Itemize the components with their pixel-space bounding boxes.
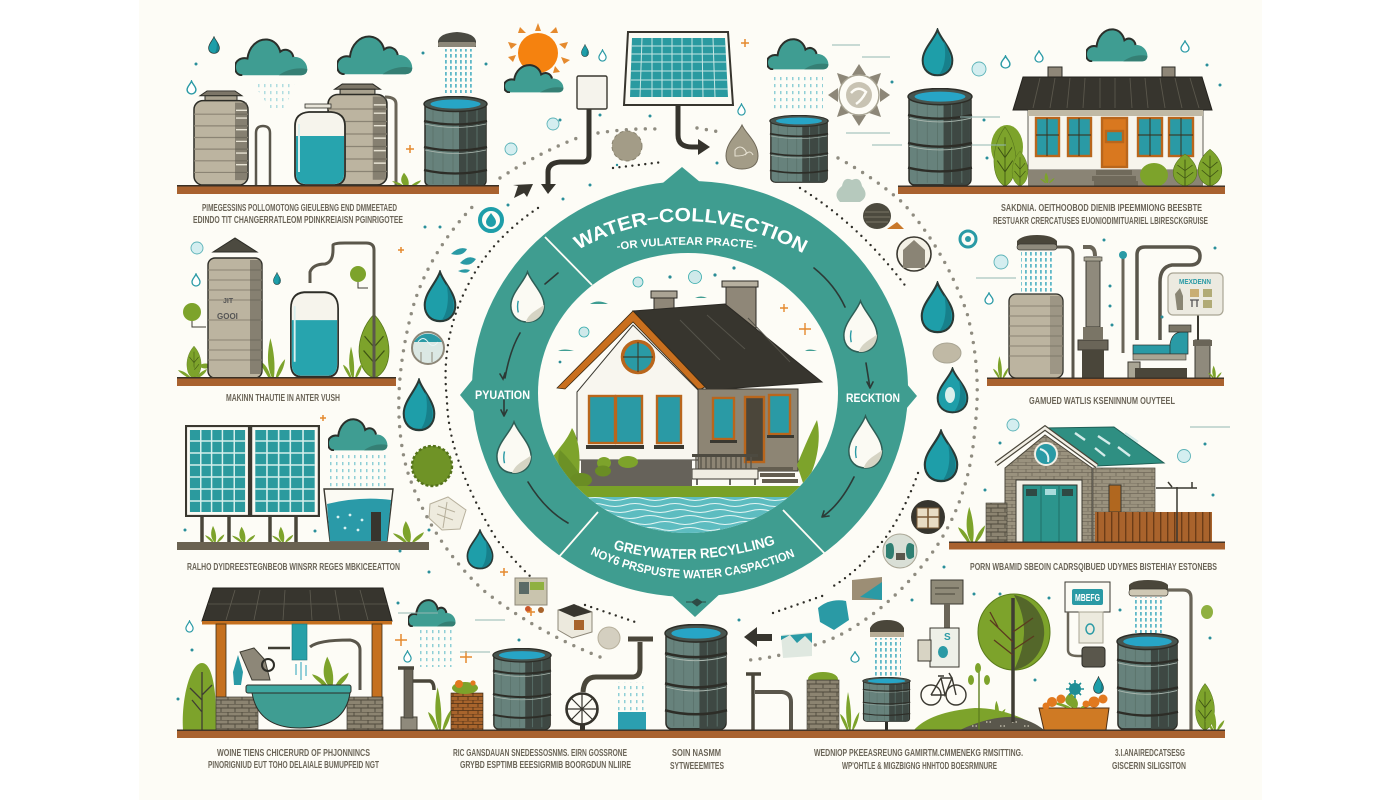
solar panels [186,426,319,516]
caption group C [670,747,724,772]
rear tank [328,84,387,185]
right cloud rain [767,39,828,112]
storage tank [194,91,248,185]
brick walls [216,697,383,730]
tap pipe [310,640,360,690]
ring label right: RECKTION [846,391,900,405]
caption: SAKDNIA. OEITHOOBOD DIENIB IPEEMMIONG BEESBTE [1001,202,1202,214]
tall tank with cone: JIT [223,298,234,305]
icon: arrow left [744,627,772,647]
plants [205,521,424,542]
round window [622,342,654,372]
plants behind [178,266,389,378]
chimneys [651,281,758,332]
flower planter [1039,677,1109,730]
ring water drops [497,272,882,473]
barrel [493,648,551,729]
roof [1013,77,1212,110]
icon: filter disc [412,332,444,364]
deck railing [692,454,758,485]
garage door [1016,480,1082,542]
posts [216,624,382,697]
downpipe [292,624,307,660]
teal water drops around ring [404,272,967,569]
walls [1028,110,1203,186]
plants in basin [233,655,349,687]
icon: house disc [897,237,931,271]
barrel [908,89,972,185]
bicycle [921,673,966,705]
icon: device with valves [515,578,547,613]
panel: garage building [949,427,1225,573]
caption group E: GISCERIN SILIGSITON [1112,760,1186,772]
panel: solar panels and glass [177,419,429,573]
ring band with arrow tips [460,167,917,617]
grey extension [698,389,798,471]
cloud and rain [408,600,456,667]
grass [840,692,859,730]
icon: green shrub ball [412,446,452,486]
panel: top-right house [898,29,1225,227]
info sign: MEXDENN [1179,277,1211,286]
icon: landscape tile [781,632,812,658]
panel pipe arrow [678,105,710,155]
teal roof [1045,427,1164,466]
caption group C: SYTWEEEMITES [670,760,724,772]
main wall [1005,435,1092,542]
small accents: dots, bubbles and plus marks [176,37,1230,700]
rain head and pipe [1017,235,1073,378]
panel: top centre solar and sun [504,23,904,229]
filter column [1078,247,1108,378]
long shelf [177,730,1225,738]
panel: middle-right filtration [987,235,1224,407]
panel: top-left tanks [177,32,499,226]
thin pole [1119,251,1127,353]
caption group A: PINORIGNIUD EUT TOHO DELAIALE BUMUPFEID NGT [208,759,379,771]
shelf [177,542,429,550]
dotted cycle paths [399,128,977,660]
ring subtitle: NOY6 PRSPUSTE WATER CASPACTION [590,546,794,578]
icon: target ring [960,231,976,247]
ring title: WATER–COLLVECTION [572,208,808,253]
control device: S [944,632,951,643]
shrubs [991,125,1222,187]
house illustration [545,266,834,537]
rain mist [252,82,295,108]
white wall [577,325,698,460]
caption: GAMUED WATLIS KSENINNUM OUYTEEL [1029,395,1175,407]
tap [398,668,434,730]
windows and door [1036,118,1193,167]
right column [1193,340,1212,378]
icon: vent box [558,604,592,638]
bottle with pipe [291,243,374,378]
ring flow arrows [500,268,873,523]
caption: EDINDO TIT CHANGERRATLEOM PDINKREIAISN PGINRIGOTEE [193,214,403,226]
caption group D: WEDNIOP PKEEASREUNG GAMIRTM.CMMENEKG RMSITTING. [814,747,1023,759]
rain head [438,32,476,93]
caption group E [1112,747,1186,772]
tall tank with cone: GOOI [217,312,238,321]
rain head and small barrel [863,620,910,730]
icon: striped stone [933,343,961,363]
caption group B: RIC GANSDAUAN SNEDESSOSNMS. EIRN GOSSRONE [453,747,627,759]
caption group B: GRYBD ESPTIMB EEESIGRMIB BOORGDUN NLIIRE [460,759,631,771]
caption group D [814,747,1023,772]
panel legs [202,517,296,542]
caption: MAKINN THAUTIE IN ANTER VUSH [226,392,340,404]
mullions [1036,118,1193,156]
caption: PORN WBAMID SBEOIN CADRSQIBUED UDYMES BISTEHIAY ESTONEBS [970,561,1217,573]
caption group E: 3.I.ANAIREDCATSESG [1115,747,1185,759]
rain head and barrel right [1117,580,1191,730]
teal pipe and pump [1128,325,1191,378]
tall tank with cone [208,238,262,378]
icon: grey circle diagram [883,534,917,568]
sun cloud [504,65,563,92]
barrel [424,96,487,186]
sky details [558,266,817,363]
tree [978,594,1050,722]
roof [633,304,822,390]
brick pillar [958,503,1007,542]
stone discs [612,125,758,169]
ring subtitle: GREYWATER RECYLLING [614,536,774,559]
large barrel [665,625,727,729]
house windows and door [589,395,790,462]
round vent [1035,443,1057,465]
segment dividers [545,237,828,558]
panel: bottom row fixtures [177,580,1225,772]
ring label left: PYUATION [475,388,530,402]
sun [508,23,570,73]
extension wall [1093,468,1155,542]
panel: pergola with basin [183,588,392,730]
caption [993,202,1208,227]
ring title: -OR VULATEAR PRACTE- [617,237,756,250]
caption [193,202,403,226]
brick planter [451,680,483,730]
water glass [324,489,393,541]
icon: white block [429,497,466,530]
gear machine [240,648,290,680]
control device [918,580,963,667]
sign and pump [1065,582,1110,667]
water splash [296,662,306,680]
overhead pipes [1137,247,1200,340]
central ring [460,167,917,617]
caption: RESTUAKR CRERCATUSES EUONIODIMITUARIEL LBIRESCKGRUISE [993,215,1208,227]
cloud [1086,29,1147,61]
pipe arch [256,126,270,186]
window sills [586,435,794,449]
shelf [987,378,1224,386]
caption group D: WP'OHTLE & MIGZBIGNG HNHTOD BOESRMNURE [842,760,997,772]
side pipe [385,97,396,186]
cloud and rain [327,419,388,490]
icon: teal map tile [818,600,849,630]
grass [428,687,451,730]
shelf [949,542,1225,550]
caption group A [208,747,379,771]
caption group C: SOIN NASMM [672,747,721,759]
pipe rain [617,682,647,730]
shelf [177,377,396,386]
sign and pump: MBEFG [1075,593,1100,604]
side window [1109,485,1121,512]
pond water [588,497,788,533]
icon: window disc [911,500,945,534]
pole lamps [1156,482,1197,542]
wheel and pipe [566,639,653,732]
fence [1095,512,1212,542]
inner disc [538,253,838,533]
beige tank [1009,294,1063,378]
glass bottle [295,104,345,185]
pale stones [836,179,904,229]
brick column [807,672,839,730]
shelf [898,186,1225,194]
pergola roof [202,588,392,624]
solar panel [624,32,733,105]
small ring icons [412,209,976,658]
gable trim [996,428,1097,466]
icon: blue swirl [451,248,476,273]
icon: stone disc [598,627,620,649]
icon: hillside tile [852,577,882,600]
steps [758,467,798,483]
post pipe [746,674,791,737]
caption group B [453,747,631,771]
caption group A: WOINE TIENS CHICERURD OF PHJONNINCS [217,747,370,759]
basin [246,685,351,728]
black arrow [513,184,533,198]
panel: middle-left tank and bottle [177,238,396,404]
bushes and lawn [554,420,819,533]
caption: PIMEGESSINS POLLOMOTONG GIEULEBNG END DMMEETAED [202,202,397,214]
ring subtitle [590,536,794,606]
grass [392,173,421,187]
white box and pipe [541,76,607,194]
orange gable trim [557,311,705,390]
lawn and gravel [914,708,1044,730]
saplings [968,663,1005,730]
info sign [1168,273,1223,340]
clouds [235,37,412,75]
icon: teal water badge [480,209,502,231]
bush [1196,684,1224,730]
steps [1092,170,1138,186]
shelf [177,185,499,194]
tree [183,663,216,730]
drop [923,30,952,75]
gear emblem [828,64,890,126]
grass [993,356,1222,378]
caption: RALHO DYIDREESTEGNBEOB WINSRR REGES MBKICEEATTON [187,561,400,573]
chimneys [1048,67,1175,83]
barrel [770,115,828,182]
